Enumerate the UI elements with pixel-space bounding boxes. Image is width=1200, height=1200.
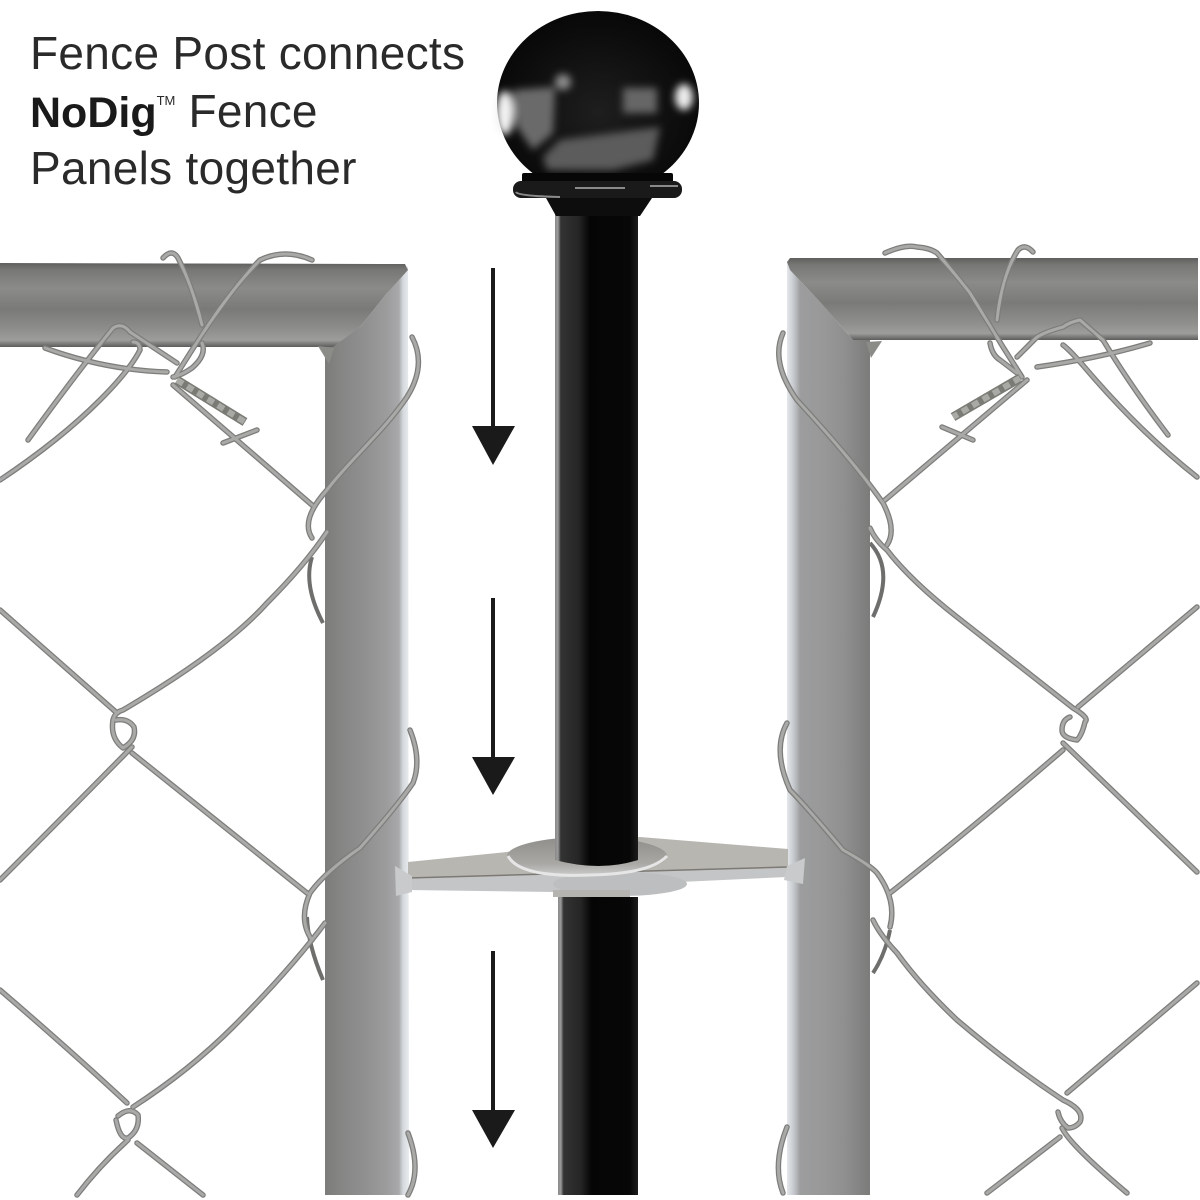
ball	[497, 11, 699, 195]
ball reflections	[496, 74, 693, 170]
black fence post	[555, 198, 638, 1195]
right fence panel	[778, 246, 1198, 1195]
left weld	[318, 346, 334, 364]
left wire twist	[177, 380, 245, 422]
title	[30, 27, 465, 194]
title: NoDigTM Fence	[30, 84, 318, 136]
collar flare	[546, 198, 652, 216]
arrow 2	[472, 598, 515, 795]
right weld	[866, 341, 882, 358]
left frame horizontal	[0, 263, 408, 347]
left fence panel	[0, 253, 418, 1195]
title: Panels together	[30, 142, 357, 194]
arrow 3	[472, 951, 515, 1148]
left rear wires	[307, 557, 323, 980]
bracket plate	[395, 837, 805, 897]
post lower	[558, 897, 638, 1195]
right rear wires	[870, 543, 890, 973]
title: Fence Post connects	[30, 27, 465, 79]
right chain link wires	[778, 246, 1197, 1193]
right frame horizontal	[787, 258, 1198, 340]
collar	[522, 173, 673, 183]
post upper	[555, 198, 638, 866]
arrow 1	[472, 268, 515, 465]
right frame vertical	[787, 262, 870, 1195]
right wire twist	[953, 378, 1020, 417]
left chain link wires	[0, 253, 418, 1195]
left frame vertical	[325, 266, 409, 1195]
ball cap	[496, 11, 699, 216]
